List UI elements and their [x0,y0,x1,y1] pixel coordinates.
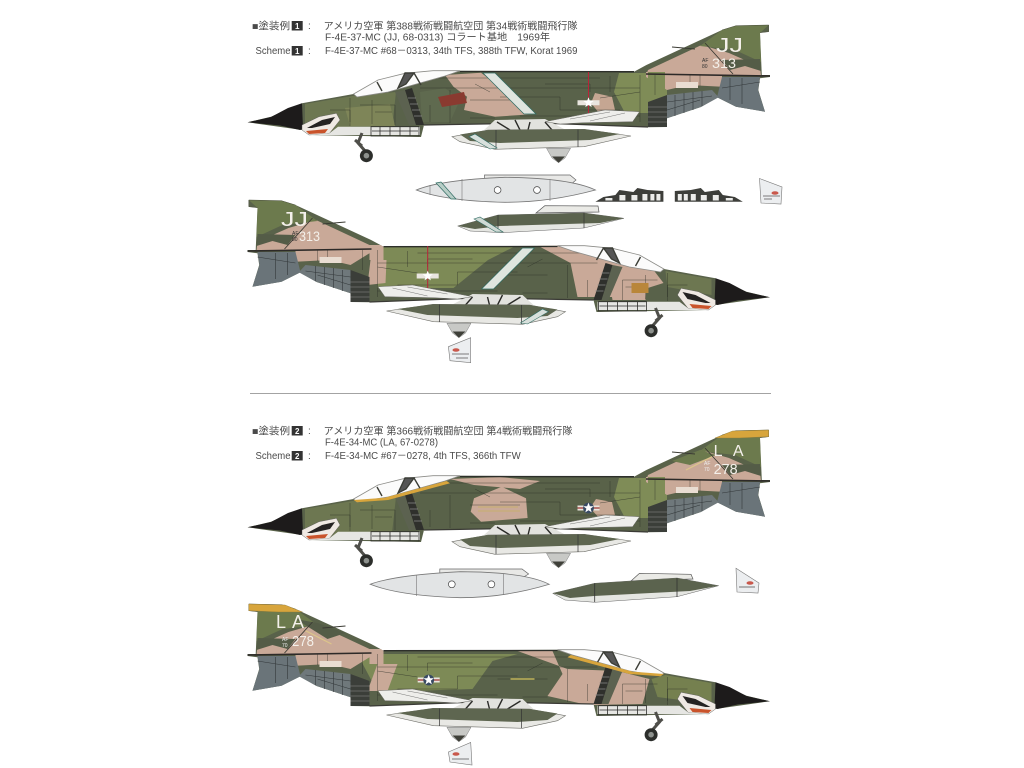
tail codes: 80 [702,64,708,70]
heading: scheme 2: Scheme [256,451,291,462]
tail codes: 70 [282,643,288,649]
tail codes: 278 [292,633,314,650]
heading: scheme 2: 2 [295,427,300,436]
yellow fuselage stencil [478,507,520,511]
heading: scheme 1: Scheme [256,46,291,57]
heading: scheme 1: ■塗装例 [252,19,290,32]
tank accessory: light tank 2 [370,569,549,598]
heading: scheme 1: 1 [295,47,300,56]
tail codes: LA [714,443,744,460]
tail codes: AF [702,58,708,64]
heading: scheme 2: F-4E-34-MC (LA, 67-0278) [325,438,438,449]
tail codes [704,443,744,478]
insignia [578,97,600,107]
fin cap yellow [715,430,769,438]
tail codes: LA [276,612,304,632]
tank accessory: light tank 1 [416,175,595,202]
tank accessory: olive tank 2 [553,573,719,602]
pylon parts left [595,188,663,202]
heading: scheme 1 [252,19,578,57]
insignia [417,271,439,280]
stripe: tank [469,134,497,149]
insignia [578,503,600,513]
tail codes: JJ [716,35,743,57]
canopy yellow stripe [354,481,450,502]
heading: scheme 2 [252,424,572,462]
heading: scheme 2: ■塗装例 [252,424,290,437]
tag 4 [448,742,472,765]
heading: scheme 2: 2 [295,452,300,461]
tail codes: 80 [292,237,298,243]
yellow fin line [686,457,712,470]
tail codes: AF [704,461,710,467]
heading: scheme 1: F-4E-37-MC (JJ, 68-0313) コラート基地 1969年 [325,31,550,44]
heading: scheme 2: : [308,451,311,462]
tank accessory: olive tank 1 [458,206,624,233]
heading: scheme 1: 1 [295,22,300,31]
tail codes [281,209,320,244]
canopy yellow stripe [568,655,664,676]
tail codes: 313 [712,55,736,71]
tail codes [276,612,314,650]
tail codes: 70 [704,467,710,473]
tail codes: AF [282,637,288,643]
tail codes: 278 [714,461,738,478]
tail codes: JJ [281,209,308,231]
tag 2 [448,338,471,363]
aircraft: scheme 2 left side [240,425,780,568]
insignia [418,675,440,685]
heading: scheme 1: F-4E-37-MC #68－0313, 34th TFS, 388th TFW, Korat 1969 [325,46,578,57]
heading: scheme 2: : [308,426,311,437]
heading: scheme 1: : [308,46,311,57]
panel: red marking [438,92,467,107]
heading: scheme 1: アメリカ空軍 第388戦術戦闘航空団 第34戦術戦闘飛行隊 [324,19,578,32]
pylon parts right [675,188,743,202]
heading: scheme 1: : [308,21,311,32]
yellow fin line [306,631,332,644]
yellow fuselage stencil [510,678,534,680]
aircraft: scheme 2 right side [238,599,778,742]
heading: scheme 2: アメリカ空軍 第366戦術戦闘航空団 第4戦術戦闘飛行隊 [324,424,572,437]
tag 3 [736,568,759,593]
divider [250,393,771,394]
fin cap yellow [249,604,302,612]
red fuselage line [588,72,590,113]
stripe: fuselage [483,73,536,114]
heading: scheme 2: F-4E-34-MC #67－0278, 4th TFS, 366th TFW [325,451,521,462]
aircraft: scheme 1 left side [240,20,780,163]
aircraft: scheme 1 right side [238,195,778,338]
tag 1 [760,178,782,204]
tail codes [702,35,743,71]
tail codes: 313 [299,228,320,244]
tail codes: AF [292,231,298,237]
